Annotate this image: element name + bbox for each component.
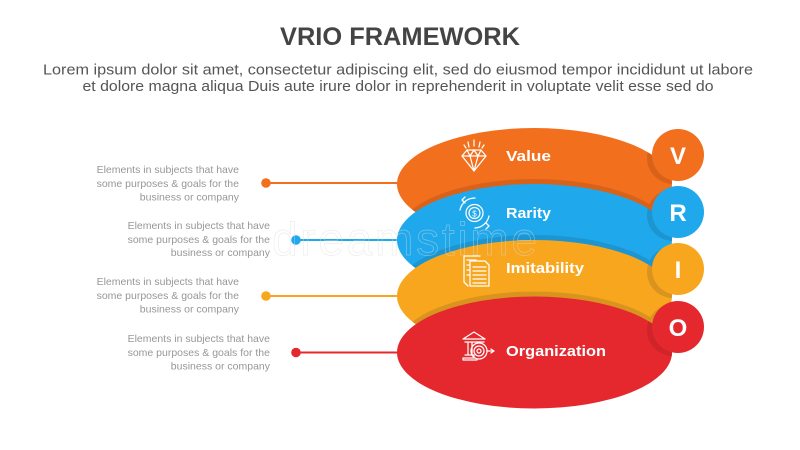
circle: I: I	[675, 257, 681, 284]
circle: I	[652, 243, 704, 295]
icon: bank target	[463, 332, 494, 360]
circle: R	[652, 186, 704, 238]
label: imitability: Imitability	[506, 260, 585, 277]
subtitle: Lorem ipsum dolor sit amet, consectetur adipiscing elit, sed do eiusmod tempor incididunt ut labore	[43, 62, 753, 78]
icon: coin cycle: $	[472, 210, 477, 218]
description: rarity: some purposes & goals for the	[128, 234, 270, 246]
icon: coin cycle	[460, 197, 489, 229]
subtitle	[43, 62, 753, 95]
band: rarity	[397, 184, 672, 268]
connector: imitability	[261, 291, 400, 301]
description: organization: Elements in subjects that have	[128, 333, 270, 345]
connector: rarity	[291, 235, 400, 245]
description: organization	[128, 333, 271, 372]
connector: organization	[291, 348, 400, 357]
description: organization: some purposes & goals for the	[128, 347, 270, 359]
circle: R: R	[669, 200, 687, 227]
description: value: Elements in subjects that have	[97, 164, 239, 176]
icon: diamond	[462, 140, 486, 171]
description: rarity: Elements in subjects that have	[128, 220, 270, 232]
subtitle: et dolore magna aliqua Duis aute irure dolor in reprehenderit in voluptate velit esse sed do	[82, 79, 714, 95]
circle: O	[652, 301, 704, 353]
circle: O: O	[669, 315, 687, 342]
band: organization	[397, 296, 699, 408]
label: rarity: Rarity	[506, 205, 552, 222]
icon: documents	[464, 256, 489, 286]
description: organization: business or company	[171, 360, 271, 372]
description: value: some purposes & goals for the	[97, 178, 239, 190]
label: value: Value	[506, 148, 551, 165]
description: value: business or company	[140, 192, 240, 204]
description: rarity: business or company	[171, 247, 271, 259]
watermark: dreamstime	[272, 213, 537, 265]
circle: V: V	[670, 143, 686, 170]
description: imitability	[97, 276, 240, 316]
band: value	[397, 128, 672, 212]
band: imitability	[397, 240, 672, 324]
connector: value	[261, 178, 400, 188]
description: rarity	[128, 220, 271, 259]
label: organization: Organization	[506, 343, 606, 360]
description: imitability: business or company	[140, 304, 240, 316]
description: imitability: some purposes & goals for the	[97, 290, 239, 302]
circle: V	[652, 129, 704, 181]
title: VRIO FRAMEWORK	[280, 23, 520, 51]
description: imitability: Elements in subjects that have	[97, 276, 239, 288]
description: value	[97, 164, 240, 204]
